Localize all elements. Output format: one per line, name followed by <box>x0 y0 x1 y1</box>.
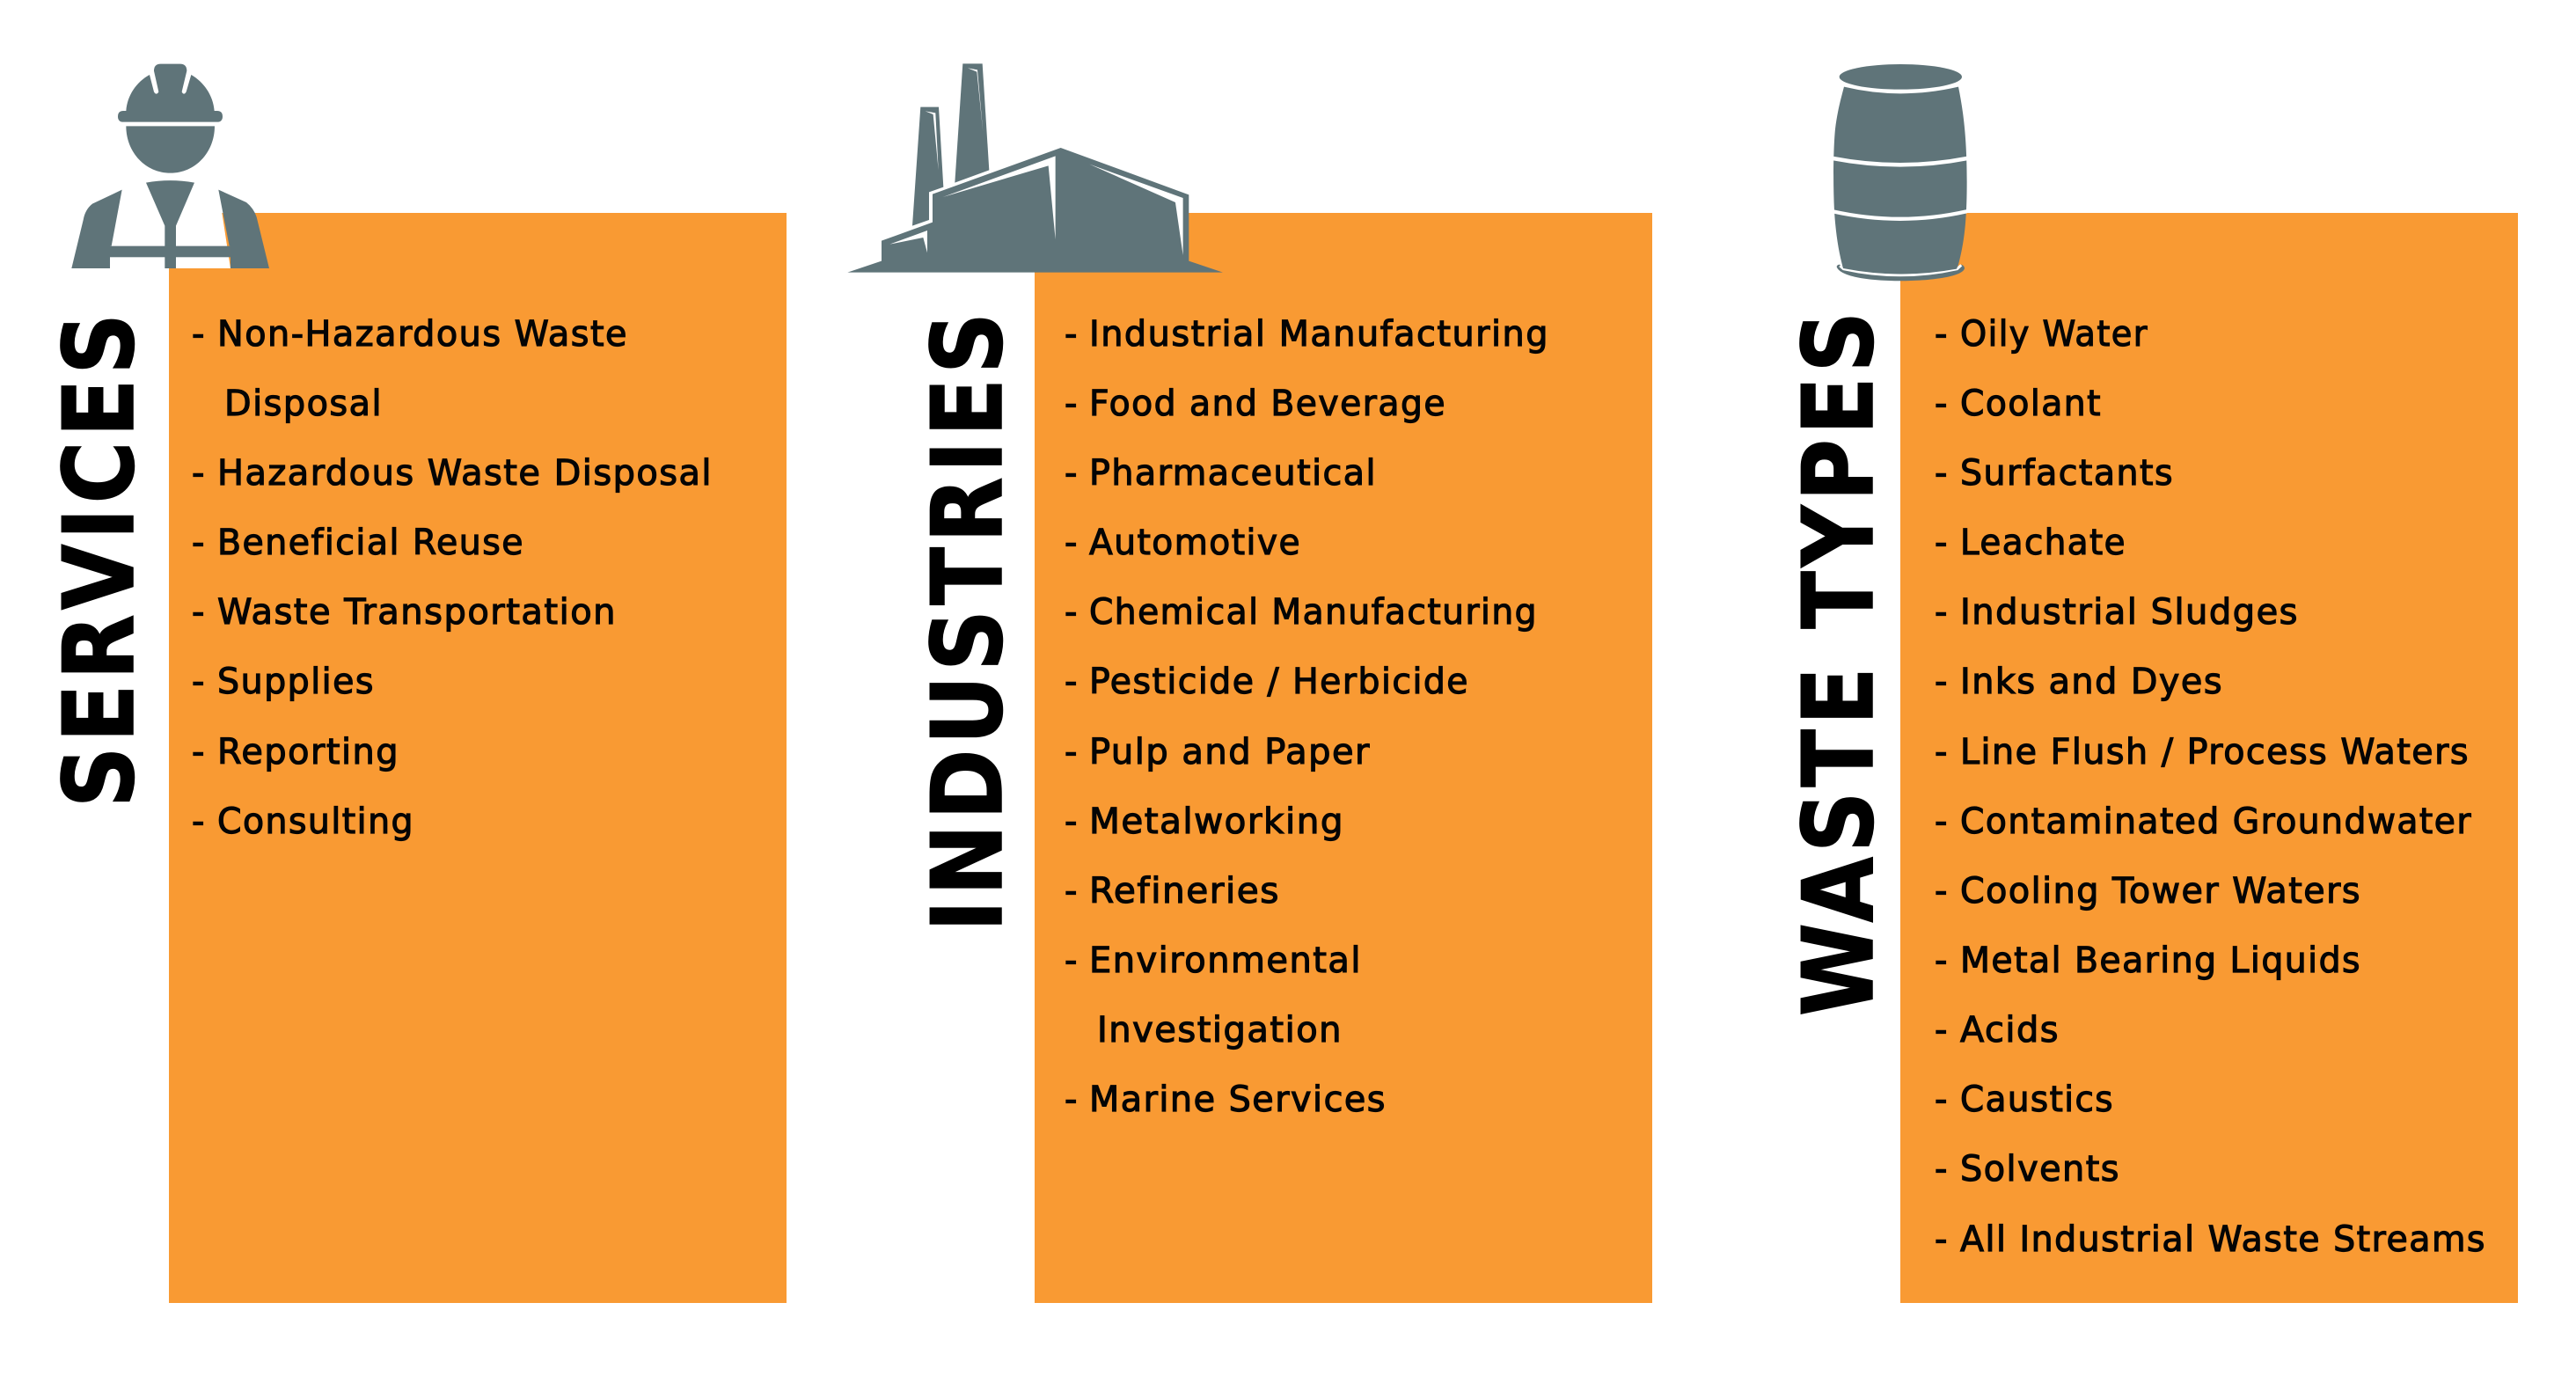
item: all industrial waste streams: - <box>1935 1219 1949 1260</box>
item: inks and dyes: - <box>1935 662 1949 702</box>
item: contaminated groundwater: Contaminated Groundwater <box>1960 801 2472 842</box>
panel: waste types <box>1782 64 2518 1303</box>
icon: construction worker <box>71 64 269 268</box>
item: surfactants: - <box>1935 453 1949 494</box>
item: supplies: Supplies <box>217 662 375 702</box>
heading: waste types: WASTE TYPES <box>1782 307 1896 1016</box>
item: waste transportation: - <box>192 592 206 633</box>
item: acids: Acids <box>1960 1010 2060 1050</box>
item: chemical manufacturing: Chemical Manufacturing <box>1089 592 1538 633</box>
item: line flush process waters: - <box>1935 732 1949 772</box>
item: marine services: - <box>1065 1080 1079 1120</box>
item: oily water: - <box>1935 314 1949 355</box>
item: leachate: Leachate <box>1960 523 2126 563</box>
item: metalworking: Metalworking <box>1089 801 1344 842</box>
item: waste transportation: Waste Transportation <box>217 592 617 633</box>
item: automotive: - <box>1065 523 1079 563</box>
item: marine services: Marine Services <box>1089 1080 1387 1120</box>
item: surfactants: Surfactants <box>1960 453 2174 494</box>
item: oily water: Oily Water <box>1960 314 2148 355</box>
item: environmental: Environmental <box>1089 941 1362 981</box>
item: food and beverage: Food and Beverage <box>1089 384 1446 424</box>
item: automotive: Automotive <box>1089 523 1301 563</box>
item: pulp and paper: Pulp and Paper <box>1089 732 1371 772</box>
item: pharmaceutical: - <box>1065 453 1079 494</box>
heading: services: SERVICES <box>43 309 157 808</box>
item: industrial sludges: - <box>1935 592 1949 633</box>
item: cooling tower waters: Cooling Tower Waters <box>1960 871 2361 911</box>
icon: factory <box>847 63 1223 273</box>
item: investigation: Investigation <box>1097 1010 1343 1050</box>
item: all industrial waste streams: All Industrial Waste Streams <box>1960 1219 2486 1260</box>
item: beneficial reuse: Beneficial Reuse <box>217 523 524 563</box>
item: supplies: - <box>192 662 206 702</box>
item: metal bearing liquids: Metal Bearing Liquids <box>1960 941 2361 981</box>
item: non-hazardous waste: - <box>192 314 206 355</box>
item: refineries: Refineries <box>1089 871 1280 911</box>
item: metalworking: - <box>1065 801 1079 842</box>
item: industrial manufacturing: Industrial Manufacturing <box>1089 314 1549 355</box>
item: pesticide herbicide: - <box>1065 662 1079 702</box>
item: food and beverage: - <box>1065 384 1079 424</box>
item: consulting: - <box>192 801 206 842</box>
heading: industries: INDUSTRIES <box>911 308 1025 932</box>
waste types orange panel <box>1900 213 2518 1303</box>
list: waste types <box>1935 314 2486 1260</box>
item: solvents: - <box>1935 1149 1949 1189</box>
item: consulting: Consulting <box>217 801 414 842</box>
industries orange panel <box>1035 213 1652 1303</box>
list: services <box>192 314 713 842</box>
item: industrial sludges: Industrial Sludges <box>1960 592 2299 633</box>
list: industries <box>1065 314 1549 1120</box>
item: line flush process waters: Line Flush / Process Waters <box>1960 732 2470 772</box>
item: refineries: - <box>1065 871 1079 911</box>
item: cooling tower waters: - <box>1935 871 1949 911</box>
item: leachate: - <box>1935 523 1949 563</box>
item: hazardous waste disposal: - <box>192 453 206 494</box>
item: hazardous waste disposal: Hazardous Waste Disposal <box>217 453 713 494</box>
item: beneficial reuse: - <box>192 523 206 563</box>
item: pulp and paper: - <box>1065 732 1079 772</box>
item: chemical manufacturing: - <box>1065 592 1079 633</box>
panel: services <box>43 64 787 1303</box>
item: coolant: - <box>1935 384 1949 424</box>
item: acids: - <box>1935 1010 1949 1050</box>
panel: industries <box>847 63 1652 1303</box>
item: metal bearing liquids: - <box>1935 941 1949 981</box>
item: pharmaceutical: Pharmaceutical <box>1089 453 1377 494</box>
icon: barrel <box>1833 64 1967 281</box>
item: disposal: Disposal <box>224 384 383 424</box>
item: pesticide herbicide: Pesticide / Herbicide <box>1089 662 1469 702</box>
item: reporting: - <box>192 732 206 772</box>
item: caustics: Caustics <box>1960 1080 2114 1120</box>
item: non-hazardous waste: Non-Hazardous Waste <box>217 314 628 355</box>
item: caustics: - <box>1935 1080 1949 1120</box>
item: reporting: Reporting <box>217 732 399 772</box>
item: industrial manufacturing: - <box>1065 314 1079 355</box>
item: coolant: Coolant <box>1960 384 2102 424</box>
services orange panel <box>169 213 787 1303</box>
item: inks and dyes: Inks and Dyes <box>1960 662 2223 702</box>
item: solvents: Solvents <box>1960 1149 2120 1189</box>
item: environmental: - <box>1065 941 1079 981</box>
item: contaminated groundwater: - <box>1935 801 1949 842</box>
